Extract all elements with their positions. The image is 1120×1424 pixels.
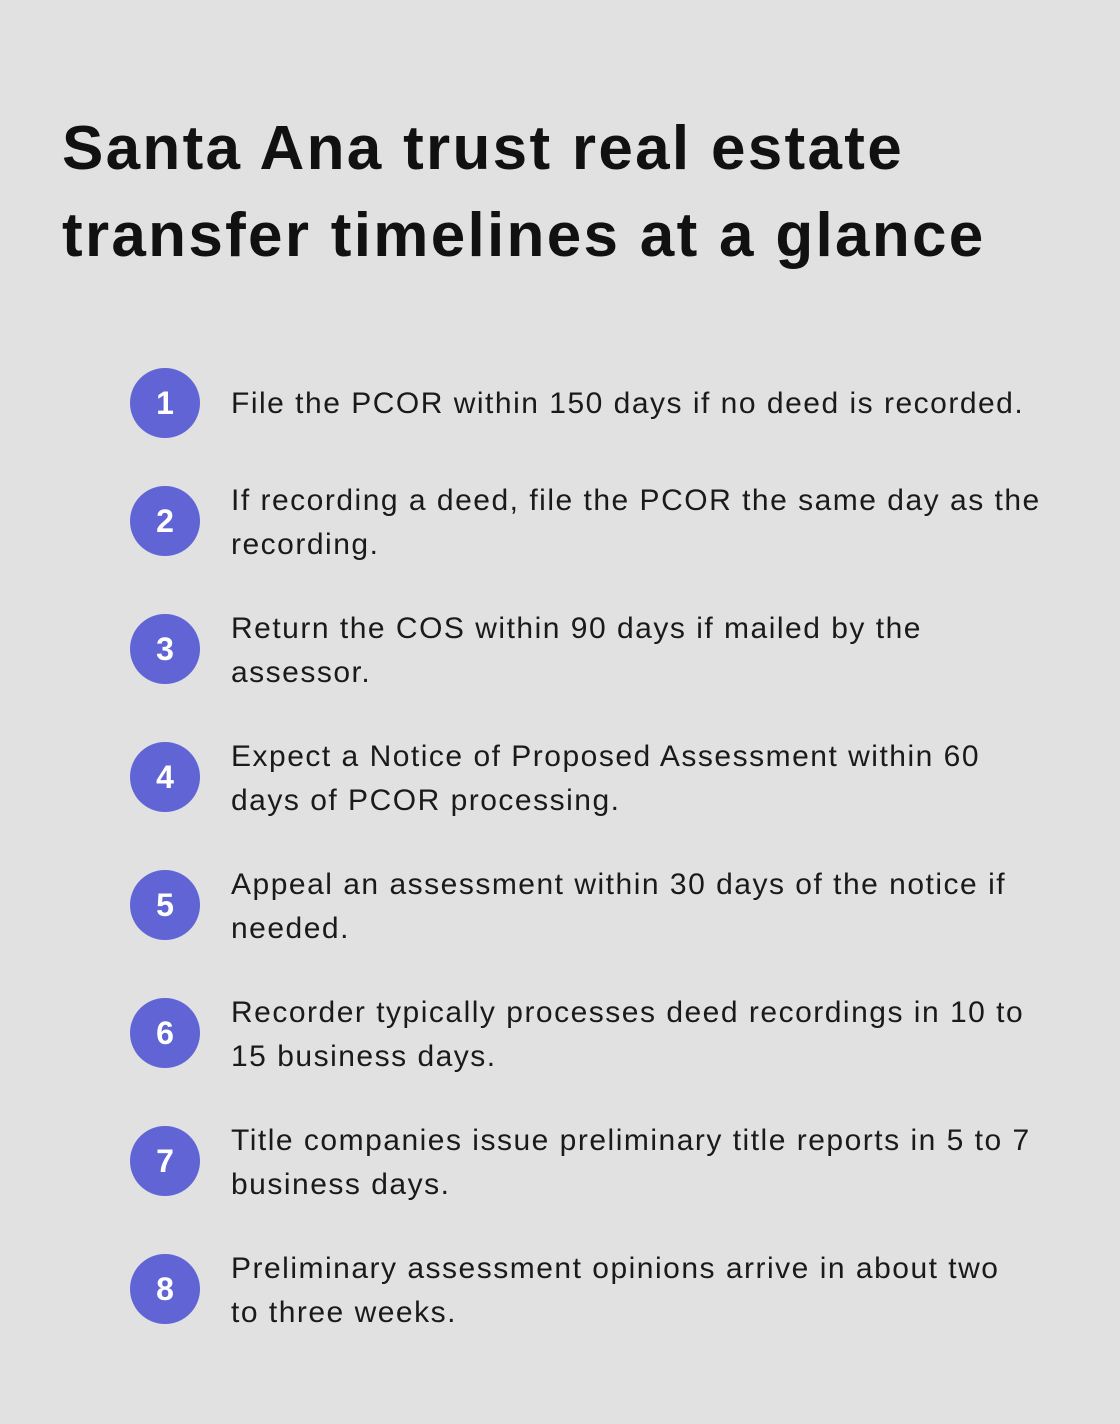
text 6: 15 business days. bbox=[231, 1040, 497, 1073]
icon: number 7 bbox=[130, 1126, 200, 1196]
icon: number 2: 2 bbox=[156, 503, 174, 539]
text 3: assessor. bbox=[231, 656, 371, 689]
item 7 bbox=[130, 1124, 1031, 1201]
icon: number 3: 3 bbox=[156, 631, 174, 667]
text 4: Expect a Notice of Proposed Assessment within 60 bbox=[231, 740, 980, 773]
title: Santa Ana trust real estate bbox=[62, 114, 904, 183]
text 6: Recorder typically processes deed recordings in 10 to bbox=[231, 996, 1024, 1029]
text 4: days of PCOR processing. bbox=[231, 784, 620, 817]
icon: number 8: 8 bbox=[156, 1271, 174, 1307]
item 4 bbox=[130, 740, 980, 817]
text 2: recording. bbox=[231, 528, 379, 561]
icon: number 5: 5 bbox=[156, 887, 174, 923]
text 4 bbox=[231, 740, 980, 817]
text 6 bbox=[231, 996, 1024, 1073]
icon: number 2 bbox=[130, 486, 200, 556]
icon: number 1 bbox=[130, 368, 200, 438]
text 1: File the PCOR within 150 days if no deed is recorded. bbox=[231, 387, 1024, 420]
text 3 bbox=[231, 612, 922, 689]
text 2 bbox=[231, 484, 1041, 561]
text 8: to three weeks. bbox=[231, 1296, 457, 1329]
icon: number 7: 7 bbox=[156, 1143, 174, 1179]
item 6 bbox=[130, 996, 1024, 1073]
title bbox=[62, 114, 986, 270]
icon: number 6 bbox=[130, 998, 200, 1068]
text 8: Preliminary assessment opinions arrive in about two bbox=[231, 1252, 999, 1285]
item 2 bbox=[130, 484, 1041, 561]
text 5: needed. bbox=[231, 912, 350, 945]
icon: number 4 bbox=[130, 742, 200, 812]
text 8 bbox=[231, 1252, 999, 1329]
text 3: Return the COS within 90 days if mailed by the bbox=[231, 612, 922, 645]
text 7: Title companies issue preliminary title reports in 5 to 7 bbox=[231, 1124, 1031, 1157]
item 8 bbox=[130, 1252, 999, 1329]
icon: number 4: 4 bbox=[156, 759, 174, 795]
text 2: If recording a deed, file the PCOR the same day as the bbox=[231, 484, 1041, 517]
item 5 bbox=[130, 868, 1006, 945]
icon: number 5 bbox=[130, 870, 200, 940]
icon: number 1: 1 bbox=[156, 385, 174, 421]
text 5: Appeal an assessment within 30 days of the notice if bbox=[231, 868, 1006, 901]
text 7: business days. bbox=[231, 1168, 450, 1201]
icon: number 6: 6 bbox=[156, 1015, 174, 1051]
text 7 bbox=[231, 1124, 1031, 1201]
item 1 bbox=[130, 368, 1024, 438]
item 3 bbox=[130, 612, 922, 689]
title: transfer timelines at a glance bbox=[62, 201, 986, 270]
text 5 bbox=[231, 868, 1006, 945]
icon: number 3 bbox=[130, 614, 200, 684]
icon: number 8 bbox=[130, 1254, 200, 1324]
